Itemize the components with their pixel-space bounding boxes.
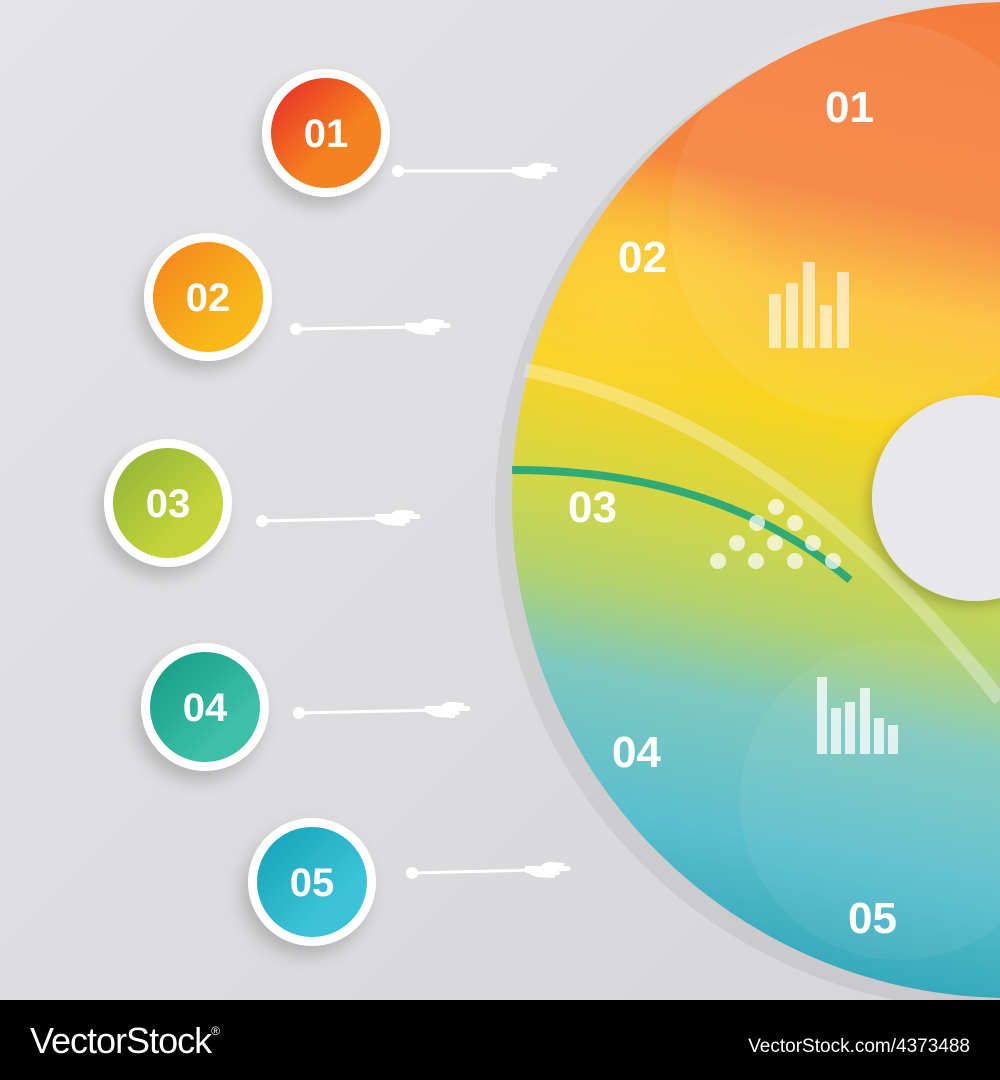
step 04 [141,643,470,771]
step 05 [248,818,570,946]
icon: bar chart 2 [817,677,898,754]
segment labels: 02 [618,233,667,282]
footer: ® [211,1024,220,1038]
segment labels: 04 [612,728,661,777]
segment labels: 03 [568,483,617,532]
step 03: 03 [146,482,190,526]
inner hole [872,395,1000,601]
disk chart [450,2,1000,1010]
segment labels: 05 [848,894,897,943]
segment labels: 01 [825,83,874,132]
segment labels [568,83,897,943]
footer: VectorStock [30,1020,211,1061]
icon: bar chart 1 [769,262,849,348]
step 02: 02 [186,276,230,320]
icon: dots [710,499,841,569]
step 05: 05 [290,861,334,905]
step 02 [144,233,450,361]
step 01 [262,69,558,197]
footer [0,1000,1000,1080]
footer: VectorStock.com/4373488 [748,1036,970,1057]
step 03 [104,439,420,567]
step 04: 04 [183,686,228,730]
step 01: 01 [304,112,348,156]
